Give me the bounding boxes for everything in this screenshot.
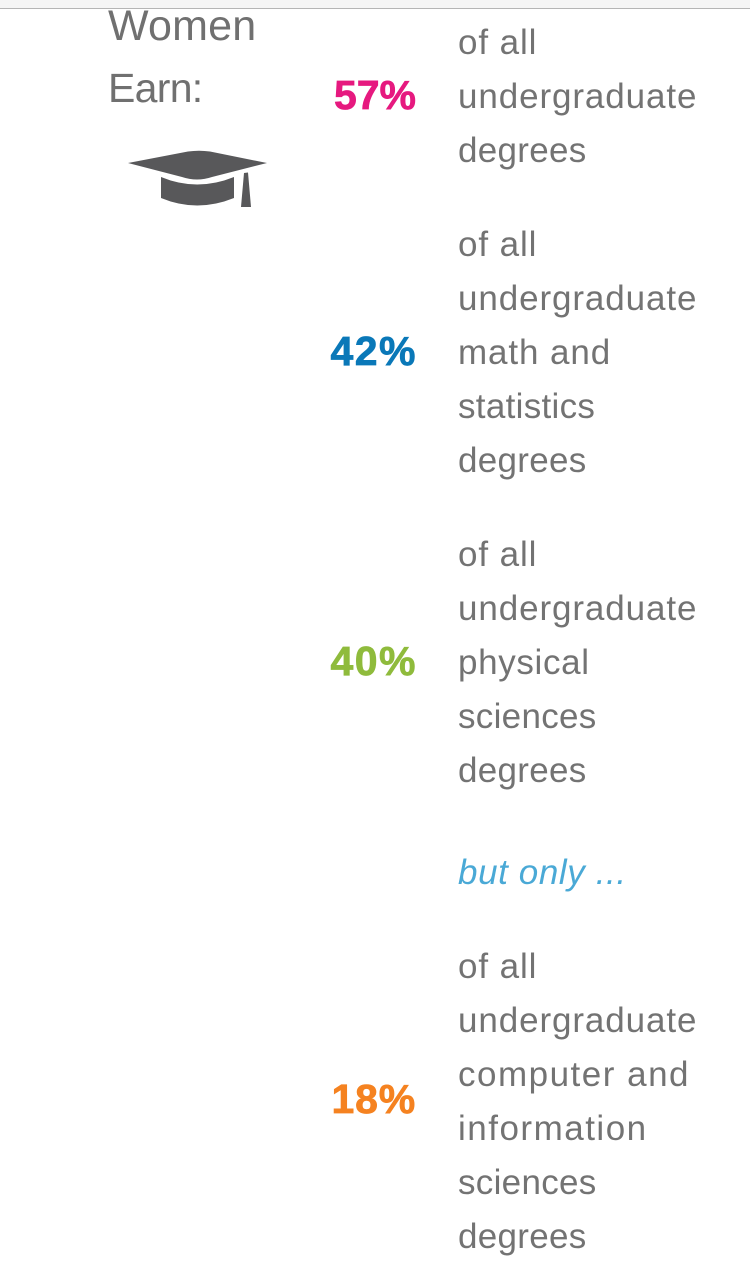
- text: math and statistics degrees: undergraduate: [458, 279, 697, 318]
- text: physical sciences degrees: degrees: [458, 751, 587, 790]
- text: math and statistics degrees: of all: [458, 225, 537, 264]
- text: computer and information sciences degrees: sciences: [458, 1163, 597, 1202]
- text: undergraduate degrees: undergraduate: [458, 77, 697, 116]
- heading: Women Earn: [108, 2, 256, 111]
- stat: 57%: 57%: [334, 72, 416, 118]
- text: physical sciences degrees: [458, 535, 697, 790]
- stat: 42%: 42%: [330, 328, 417, 374]
- text: computer and information sciences degrees: degrees: [458, 1217, 587, 1256]
- text: math and statistics degrees: degrees: [458, 441, 587, 480]
- text: physical sciences degrees: undergraduate: [458, 589, 697, 628]
- icon: graduation cap: [128, 150, 267, 207]
- callout: but only: but only ...: [458, 853, 627, 892]
- text: undergraduate degrees: [458, 23, 697, 170]
- text: computer and information sciences degrees: information: [458, 1109, 648, 1148]
- text: computer and information sciences degrees: of all: [458, 947, 537, 986]
- stat: 40%: 40%: [330, 638, 417, 684]
- heading: Women Earn: Earn:: [108, 65, 202, 111]
- text: computer and information sciences degrees: [458, 947, 697, 1256]
- heading: Women Earn: Women: [108, 2, 256, 50]
- text: physical sciences degrees: of all: [458, 535, 537, 574]
- text: math and statistics degrees: [458, 225, 697, 480]
- text: undergraduate degrees: of all: [458, 23, 537, 62]
- text: computer and information sciences degrees: undergraduate: [458, 1001, 697, 1040]
- text: undergraduate degrees: degrees: [458, 131, 587, 170]
- text: physical sciences degrees: physical: [458, 643, 590, 682]
- text: computer and information sciences degrees: computer and: [458, 1055, 690, 1094]
- stat: 18%: 18%: [332, 1076, 416, 1122]
- text: physical sciences degrees: sciences: [458, 697, 597, 736]
- text: math and statistics degrees: statistics: [458, 387, 595, 426]
- text: math and statistics degrees: math and: [458, 333, 611, 372]
